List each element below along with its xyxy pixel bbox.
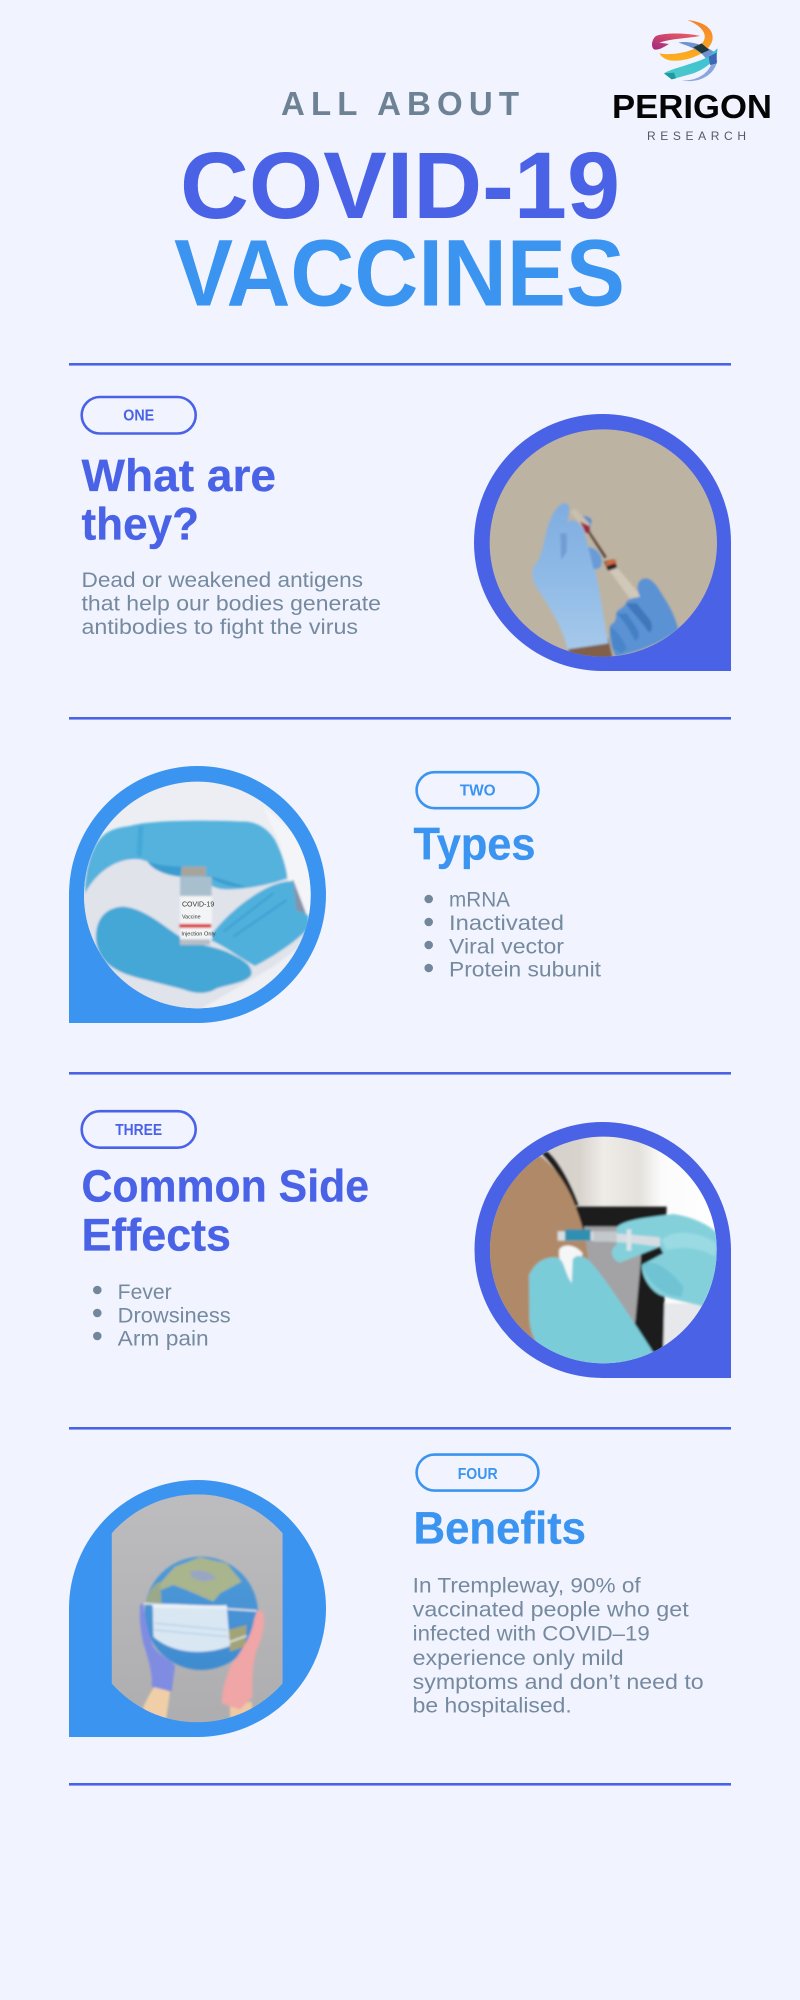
photo: arm injection <box>487 1133 720 1368</box>
list: vaccine types: mRNA <box>449 889 510 912</box>
panel: two, types <box>69 766 601 1023</box>
title block <box>174 85 625 327</box>
body text: definition <box>82 569 381 639</box>
heading: common side effects: Effects <box>82 1210 231 1261</box>
list: vaccine types: Inactivated <box>449 912 564 935</box>
logo subtitle: RESEARCH <box>647 129 746 143</box>
panel: four, benefits <box>69 1455 704 1737</box>
pill: three <box>82 1111 196 1148</box>
list: vaccine types: Viral vector <box>449 935 564 958</box>
heading: what are they <box>82 450 276 550</box>
body text: definition: that help our bodies generate <box>82 592 381 616</box>
vial label text <box>181 902 216 937</box>
vial label text: COVID-19 <box>182 902 214 909</box>
body text: definition: antibodies to fight the virus <box>82 616 358 639</box>
photo: gloved hands with vial <box>80 777 317 1013</box>
body text: benefits: vaccinated people who get <box>413 1599 689 1622</box>
pill: four: FOUR <box>458 1466 498 1483</box>
list: side effects <box>93 1281 231 1351</box>
list: vaccine types: Protein subunit <box>449 959 601 982</box>
pill: one <box>82 397 196 434</box>
pill: two <box>417 772 538 808</box>
logo wordmark: PERIGON <box>612 88 772 125</box>
panel: one, what are they <box>82 397 731 671</box>
logo: Perigon Research <box>612 20 772 143</box>
heading: common side effects: Common Side <box>82 1161 369 1212</box>
image frame: vial photo <box>69 766 326 1023</box>
photo: globe wearing a mask <box>112 1494 283 1722</box>
photo: gloved hands with syringe <box>487 427 720 660</box>
panel: three, common side effects <box>82 1111 731 1378</box>
title line: VACCINES: VACCINES <box>174 221 625 327</box>
list: side effects: Drowsiness <box>118 1304 231 1327</box>
image frame: injection photo <box>474 1122 731 1378</box>
title line: COVID-19: COVID-19 <box>180 133 620 239</box>
body text: benefits <box>413 1575 704 1718</box>
heading: common side effects <box>82 1161 369 1261</box>
body text: benefits: symptoms and don’t need to <box>413 1671 704 1694</box>
body text: benefits: be hospitalised. <box>413 1695 572 1718</box>
logo swoosh icon <box>652 20 717 81</box>
image frame: globe photo <box>69 1480 326 1737</box>
list: vaccine types <box>424 889 601 982</box>
image frame: syringe photo <box>474 414 731 671</box>
heading: benefits: Benefits <box>414 1502 586 1553</box>
pill: two: TWO <box>460 783 496 800</box>
heading: what are they: they? <box>82 498 199 550</box>
vial label text: Injection Only <box>181 931 216 937</box>
heading: what are they: What are <box>82 450 276 501</box>
pill: four <box>417 1455 538 1491</box>
vial label text: Vaccine <box>182 914 201 920</box>
body text: benefits: In Trempleway, 90% of <box>413 1575 641 1598</box>
body text: benefits: infected with COVID–19 <box>413 1623 650 1646</box>
list: side effects: Arm pain <box>118 1328 209 1351</box>
pill: one: ONE <box>123 408 154 425</box>
body text: benefits: experience only mild <box>413 1647 624 1670</box>
body text: definition: Dead or weakened antigens <box>82 569 363 592</box>
eyebrow: all about: ALL ABOUT <box>281 85 519 122</box>
pill: three: THREE <box>115 1122 162 1139</box>
heading: types: Types <box>414 818 536 869</box>
list: side effects: Fever <box>118 1281 172 1304</box>
